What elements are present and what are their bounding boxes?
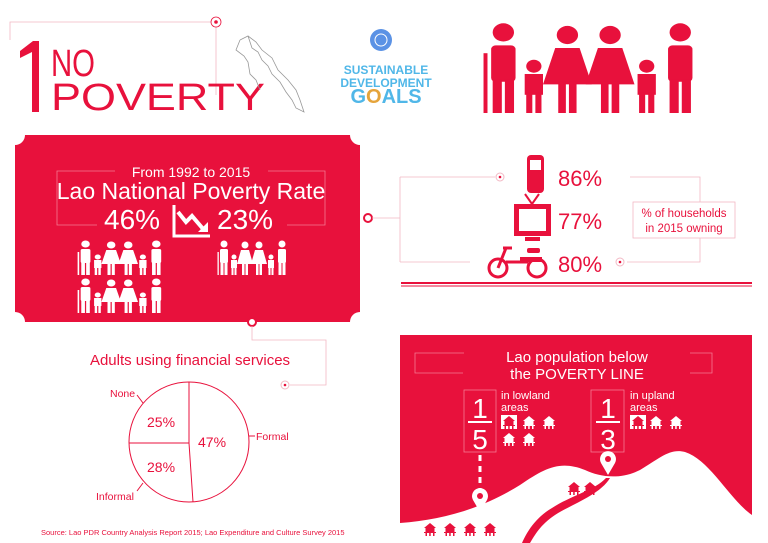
- fraction 1/3: areas: [630, 402, 658, 414]
- SDG logo: DEVELOPMENT: [340, 76, 432, 90]
- icon: down arrow chart: [174, 205, 210, 236]
- fraction 1/5: areas: [501, 402, 529, 414]
- panel: financial services pie: 47%: [198, 434, 226, 450]
- pins: [478, 455, 482, 490]
- river: [522, 478, 610, 543]
- panel: poverty line landscape: Lao population below: [506, 349, 648, 366]
- callout: households label: [633, 202, 735, 238]
- fraction 1/5: 1: [472, 393, 488, 424]
- panel: poverty rate: Lao National Poverty Rate: [57, 178, 325, 204]
- fraction 1/3: [591, 390, 682, 455]
- icon: phone: [527, 155, 544, 193]
- panel: poverty rate: [15, 135, 372, 326]
- fraction 1/5: [464, 390, 555, 455]
- panel: poverty line landscape: the POVERTY LINE: [510, 366, 644, 383]
- fraction 1/3: 3: [600, 424, 616, 455]
- icon: moped: [489, 248, 546, 277]
- title block: NO: [51, 43, 95, 85]
- callout: households label: % of households: [641, 208, 727, 220]
- title block: POVERTY: [51, 77, 265, 119]
- icon: Laos map: [236, 36, 304, 112]
- fraction 1/3: in upland: [630, 390, 675, 402]
- title block: [8, 17, 265, 119]
- source text: Source: Lao PDR Country Analysis Report 2015; Lao Expenditure and Culture Survey 2015: [41, 528, 345, 537]
- houses: [424, 482, 596, 536]
- panel: household ownership: [401, 155, 752, 286]
- panel: poverty rate: 46%: [104, 204, 160, 235]
- hills: [400, 451, 752, 543]
- fraction 1/5: 5: [472, 424, 488, 455]
- panel: financial services pie: 28%: [147, 459, 175, 475]
- panel: poverty line landscape: [400, 335, 752, 543]
- panel: financial services pie: 25%: [147, 414, 175, 430]
- panel: household ownership: 77%: [558, 209, 602, 234]
- icon: family: [484, 23, 692, 113]
- SDG logo: GOALS: [350, 86, 422, 108]
- callout: households label: in 2015 owning: [645, 223, 723, 235]
- fraction 1/5: in lowland: [501, 390, 550, 402]
- panel: financial services pie: [90, 352, 290, 503]
- panel: poverty rate: From 1992 to 2015: [132, 164, 250, 180]
- panel: financial services pie: Informal: [96, 491, 134, 503]
- panel: financial services pie: Adults using financial services: [90, 352, 290, 369]
- panel: financial services pie: None: [110, 388, 135, 400]
- SDG logo: [340, 29, 432, 108]
- panel: household ownership: 86%: [558, 166, 602, 191]
- panel: poverty rate: 23%: [217, 204, 273, 235]
- panel: household ownership: 80%: [558, 252, 602, 277]
- connectors: [252, 177, 700, 385]
- panel: financial services pie: Formal: [256, 431, 289, 443]
- icon: tv: [514, 194, 551, 241]
- SDG logo: SUSTAINABLE: [344, 63, 428, 77]
- fraction 1/3: 1: [600, 393, 616, 424]
